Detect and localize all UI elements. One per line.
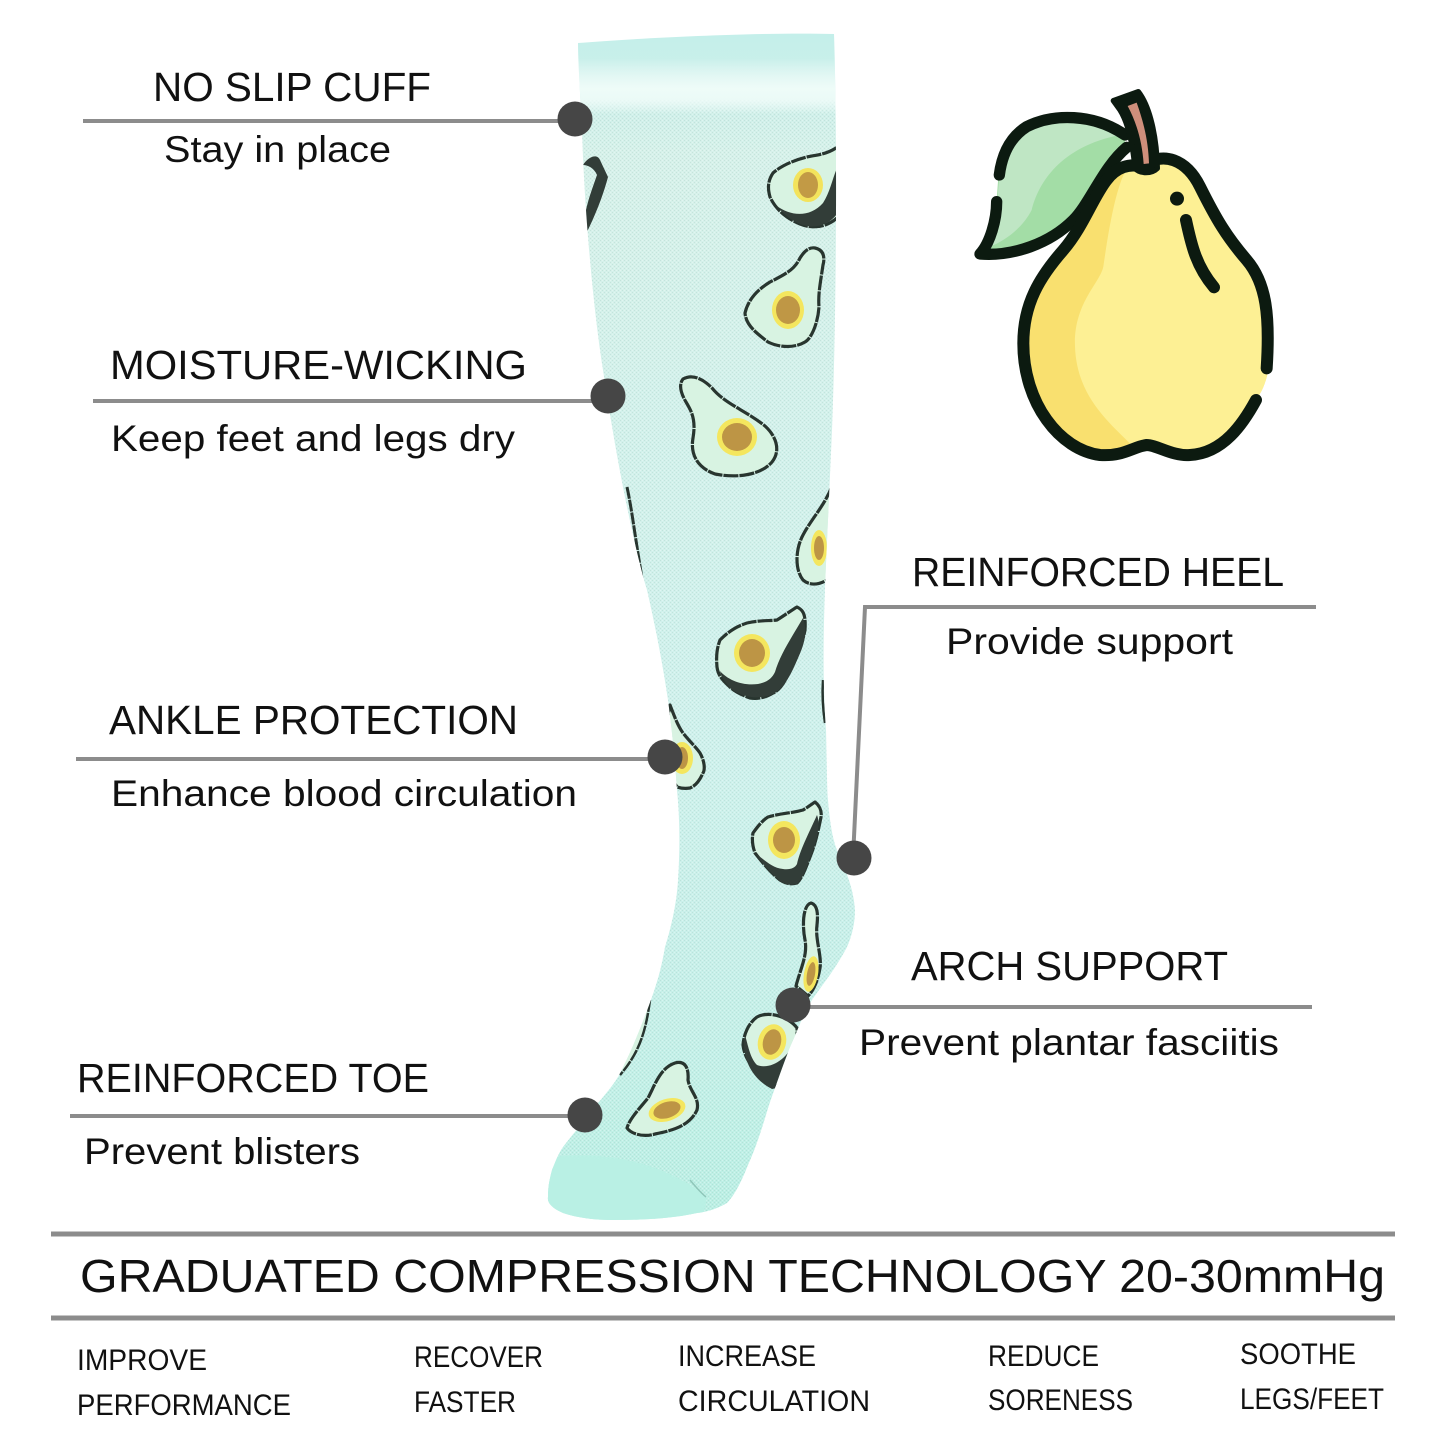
- benefit: increase circulation: INCREASE: [678, 1340, 816, 1373]
- avocado edge fragments: [583, 156, 825, 1075]
- marker dot: [558, 102, 592, 136]
- description: Stay in place: [164, 129, 391, 170]
- leader line: [76, 757, 665, 761]
- marker dot: [836, 840, 872, 876]
- benefit: recover faster: [414, 1341, 543, 1419]
- avocado 10: [627, 1062, 698, 1135]
- avocado 4: [797, 486, 834, 584]
- marker dot: [590, 378, 626, 414]
- sock pattern and cuff: [540, 58, 870, 1230]
- leaf: [980, 118, 1127, 254]
- leader line: [83, 119, 575, 123]
- description: Prevent blisters: [84, 1131, 360, 1172]
- description: Provide support: [946, 621, 1234, 662]
- description: Enhance blood circulation: [111, 773, 577, 814]
- sock illustration: [540, 34, 870, 1230]
- avocado 2: [745, 248, 824, 346]
- benefit: soothe legs/feet: SOOTHE: [1240, 1338, 1356, 1371]
- benefit: recover faster: RECOVER: [414, 1341, 543, 1374]
- banner bottom rule: [51, 1316, 1395, 1320]
- benefit: improve performance: IMPROVE: [77, 1344, 207, 1377]
- leader line: [70, 1114, 585, 1118]
- heading: NO SLIP CUFF: [153, 64, 431, 110]
- avocado 3: [681, 377, 777, 476]
- benefit: soothe legs/feet: LEGS/FEET: [1240, 1383, 1384, 1416]
- callout: reinforced toe: [70, 1055, 602, 1172]
- benefit: increase circulation: [678, 1340, 870, 1418]
- stem: [1113, 92, 1157, 173]
- avocado 6: [668, 703, 706, 790]
- benefit: soothe legs/feet: [1240, 1338, 1384, 1416]
- benefit: improve performance: PERFORMANCE: [77, 1389, 291, 1422]
- avocado 5: [717, 607, 805, 698]
- leader line: [93, 399, 608, 403]
- banner title: GRADUATED COMPRESSION TECHNOLOGY 20-30mmHg: [80, 1250, 1385, 1302]
- benefit: improve performance: [77, 1344, 291, 1422]
- callout: no slip cuff: [83, 64, 592, 170]
- callout: moisture-wicking: [93, 342, 626, 459]
- sock body: [548, 34, 855, 1220]
- marker dot: [776, 988, 810, 1022]
- leader line: [853, 607, 1316, 858]
- marker dot: [568, 1098, 602, 1132]
- description: Prevent plantar fasciitis: [859, 1022, 1279, 1063]
- avocado 7: [752, 802, 821, 885]
- description: Keep feet and legs dry: [111, 418, 516, 459]
- callout: arch support: [776, 943, 1312, 1063]
- marker dot: [648, 740, 682, 774]
- callout: reinforced heel: [836, 549, 1316, 876]
- pear icon: [980, 92, 1269, 455]
- avocado 1: [768, 148, 840, 227]
- heading: ANKLE PROTECTION: [109, 697, 518, 743]
- avocado 9: [743, 1014, 797, 1089]
- benefit: recover faster: FASTER: [414, 1386, 516, 1419]
- benefit: reduce soreness: [988, 1340, 1133, 1417]
- banner top rule: [51, 1232, 1395, 1236]
- heading: ARCH SUPPORT: [911, 943, 1228, 989]
- benefit: reduce soreness: REDUCE: [988, 1340, 1099, 1373]
- benefit: increase circulation: CIRCULATION: [678, 1385, 870, 1418]
- leader line: [793, 1005, 1312, 1009]
- heading: MOISTURE-WICKING: [110, 342, 527, 388]
- callout: ankle protection: [76, 697, 682, 814]
- benefit: reduce soreness: SORENESS: [988, 1384, 1133, 1417]
- avocado 8: [796, 903, 821, 996]
- pear body: [1023, 159, 1269, 455]
- heading: REINFORCED TOE: [77, 1055, 429, 1101]
- heading: REINFORCED HEEL: [912, 549, 1284, 595]
